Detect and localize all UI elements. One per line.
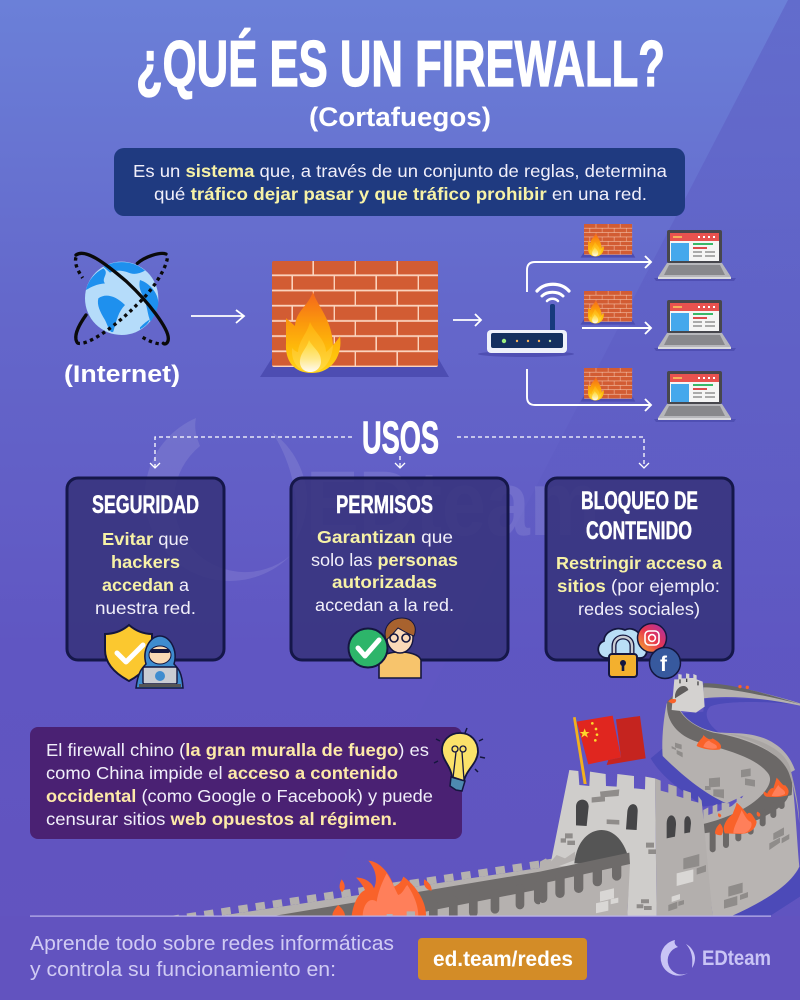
arrow: internet to firewall (191, 310, 244, 323)
footer text: y controla su funcionamiento en: (30, 959, 336, 981)
card: permisos: autorizadas (332, 572, 437, 592)
subtitle: (Cortafuegos) (309, 102, 491, 132)
lower curved wall (702, 770, 799, 916)
icon: brick firewall with flame (260, 261, 449, 377)
blue shadows (651, 698, 800, 916)
outer gray rim (720, 733, 799, 823)
footer text: Aprende todo sobre redes informáticas (30, 933, 394, 955)
tower side (655, 778, 713, 916)
watermark logo: EDteam (306, 453, 600, 555)
icon: wifi router (478, 284, 574, 357)
icon: shield (105, 625, 152, 681)
card: bloqueo de contenido (546, 478, 733, 678)
big flame (352, 861, 426, 916)
wall flames (668, 685, 789, 835)
card: permisos: Garantizan que (317, 527, 453, 547)
watermark logo (145, 418, 600, 581)
left parapet (540, 852, 575, 873)
card: bloqueo de contenido: BLOQUEO DE (581, 487, 698, 515)
dark walkway (667, 693, 792, 833)
logo: EDteam (661, 940, 771, 976)
icon: green check (348, 628, 388, 668)
wall drips (713, 798, 782, 849)
small firewall 3 (581, 368, 635, 402)
footer text (30, 933, 394, 981)
card: seguridad: Evitar que (102, 529, 189, 549)
arch (574, 830, 629, 863)
card: bloqueo de contenido: Restringir acceso a (556, 553, 722, 573)
card: permisos: PERMISOS (336, 491, 433, 519)
arrow: firewall to router (453, 314, 481, 326)
icon: padlock (609, 637, 637, 677)
walkway band through tower (540, 853, 630, 884)
callout: chinese firewall: censurar sitios web opuestos al régimen. (46, 809, 397, 829)
footer cover (0, 916, 800, 1000)
card: bloqueo de contenido: CONTENIDO (586, 517, 692, 545)
icon: facebook (650, 648, 680, 678)
inner curved wall (662, 703, 795, 803)
laptop 2 (654, 300, 736, 351)
icon: facebook: f (660, 653, 668, 676)
far road (703, 685, 800, 706)
icon: shield check (117, 645, 143, 662)
stones (561, 743, 789, 911)
icon: instagram (638, 624, 666, 652)
callout: chinese firewall: occidental (como Google o Facebook) y puede (46, 786, 433, 806)
card: seguridad: accedan a (102, 575, 189, 595)
icon: light bulb (434, 728, 485, 791)
button: course link (418, 938, 587, 980)
definition box (114, 148, 685, 216)
footer divider (30, 916, 771, 917)
callout: chinese firewall (30, 727, 462, 839)
small firewall 2 (581, 291, 635, 325)
logo: EDteam: EDteam (702, 947, 771, 970)
definition box: qué tráfico dejar pasar y que tráfico prohibir en una red. (154, 184, 647, 204)
wall below tower band (540, 863, 630, 916)
card: permisos (291, 478, 508, 678)
small firewall 1 (581, 224, 635, 258)
card: seguridad: nuestra red. (95, 598, 196, 618)
laptop 1 (654, 230, 736, 281)
definition box: Es un sistema que, a través de un conjunto de reglas, determina (133, 161, 667, 181)
internet label: (Internet) (64, 361, 180, 388)
windows (576, 679, 699, 838)
card: permisos: accedan a la red. (315, 595, 454, 615)
card: seguridad: SEGURIDAD (92, 491, 199, 519)
flag (573, 716, 646, 784)
icon: internet globe (75, 253, 168, 344)
dashed connectors (150, 437, 649, 468)
small tower (672, 673, 705, 713)
arrows: router to laptops (527, 256, 651, 411)
callout: chinese firewall: El firewall chino ( la gran muralla de fuego ) es (46, 740, 429, 760)
button: course link: ed.team/redes (433, 948, 573, 971)
card: bloqueo de contenido: redes sociales) (578, 599, 700, 619)
parapet strip (703, 780, 773, 827)
great wall: low section with big flame (174, 858, 568, 916)
great wall: tower and curved section (540, 673, 800, 916)
laptop 3 (654, 371, 736, 422)
icon: cloud (598, 629, 647, 658)
card: permisos: solo las personas (311, 550, 458, 570)
card: bloqueo de contenido: sitios (por ejemplo: (557, 576, 720, 596)
icon: hacker (136, 636, 183, 688)
heading: usos: USOS (362, 412, 439, 463)
card: seguridad (67, 478, 224, 688)
icon: person (379, 618, 421, 678)
callout: chinese firewall: como China impide el acceso a contenido (46, 763, 398, 783)
card: seguridad: hackers (111, 552, 180, 572)
tower front (550, 770, 657, 916)
